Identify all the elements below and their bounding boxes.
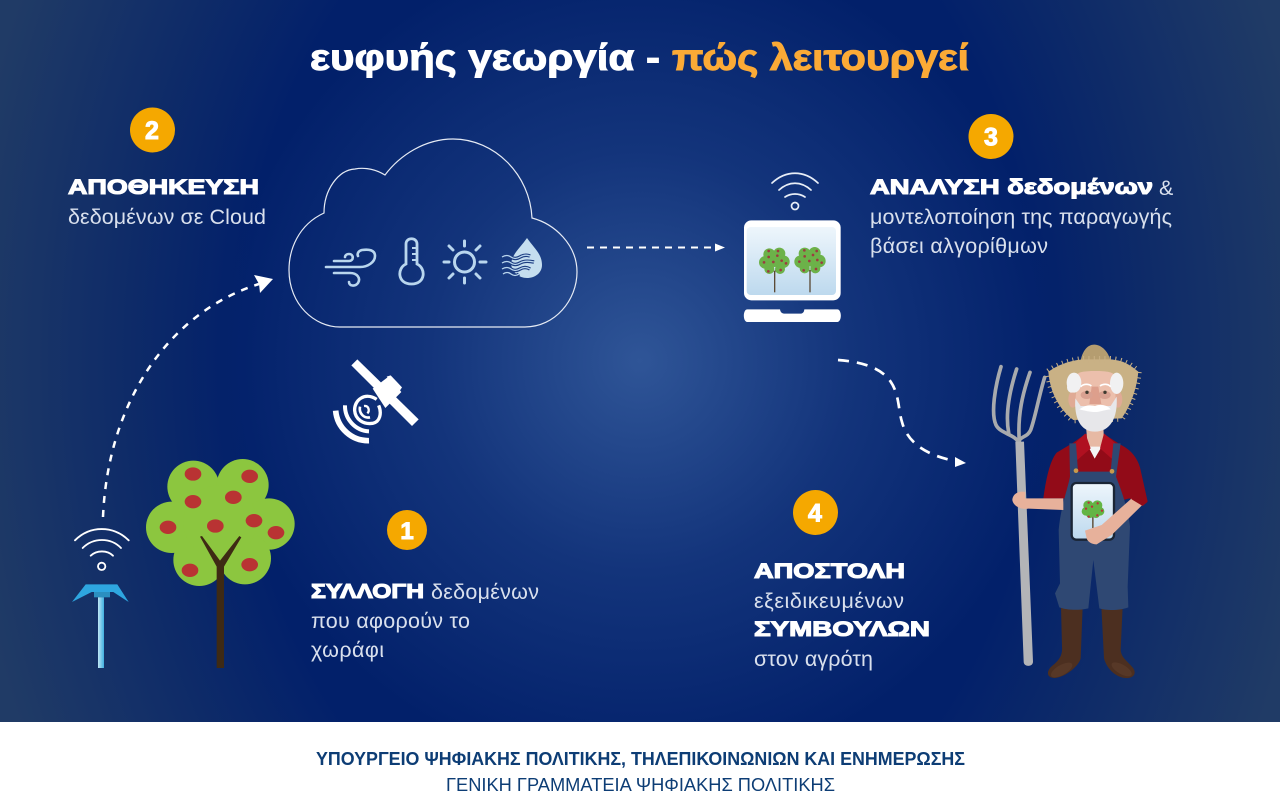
footer text xyxy=(316,749,965,795)
step 3 text: analysis xyxy=(870,176,1173,258)
tree right xyxy=(794,247,826,292)
step 2 badge: 2 xyxy=(145,117,159,145)
arrow: laptop to farmer xyxy=(838,360,966,467)
icon: humidity drop xyxy=(502,238,542,278)
straw hat xyxy=(1048,345,1138,420)
right arm and hand xyxy=(1085,496,1147,544)
footer band xyxy=(0,722,1280,812)
apples xyxy=(160,467,284,577)
step 1 badge xyxy=(387,510,427,550)
footer text: ΓΕΝΙΚΗ ΓΡΑΜΜΑΤΕΙΑ ΨΗΦΙΑΚΗΣ ΠΟΛΙΤΙΚΗΣ xyxy=(446,775,835,795)
step 4 badge: 4 xyxy=(808,500,822,528)
title: πώς λειτουργεί xyxy=(672,37,969,78)
step 1 text: collection xyxy=(311,580,539,662)
step 4 text: advice: εξειδικευμένων xyxy=(754,589,904,613)
step 3 badge xyxy=(968,114,1014,159)
icon: sun xyxy=(444,241,486,283)
step 2 text: storage xyxy=(68,176,266,229)
step 4 text: advice: ΣΥΜΒΟΥΛΩΝ xyxy=(754,618,930,641)
icon: thermometer xyxy=(400,239,423,284)
tablet xyxy=(1072,483,1114,540)
step 4 text: advice xyxy=(754,560,930,671)
step 3 text: analysis: βάσει αλγορίθμων xyxy=(870,234,1048,258)
step 2 text: storage: δεδομένων σε Cloud xyxy=(68,205,266,229)
title: ευφυής γεωργία - xyxy=(310,37,660,78)
step 3 text: analysis: ΑΝΑΛΥΣΗ δεδομένων xyxy=(870,176,1153,199)
step 1 badge: 1 xyxy=(400,518,414,545)
arrow: cloud to laptop xyxy=(587,244,725,252)
left arm xyxy=(1012,492,1063,510)
step 3 text: analysis: & xyxy=(1159,176,1173,200)
step 1 text: collection: ΣΥΛΛΟΓΗ xyxy=(311,580,424,603)
title xyxy=(310,37,969,78)
footer text: ΥΠΟΥΡΓΕΙΟ ΨΗΦΙΑΚΗΣ ΠΟΛΙΤΙΚΗΣ, ΤΗΛΕΠΙΚΟΙΝΩΝΙΩΝ ΚΑΙ ΕΝΗΜΕΡΩΣΗΣ xyxy=(316,749,965,769)
boots xyxy=(1048,607,1135,680)
icon: apple tree xyxy=(146,459,295,668)
icon: field sensor with wifi xyxy=(72,529,129,668)
step 2 badge xyxy=(130,108,175,152)
icon: wifi above laptop xyxy=(772,173,818,210)
step 3 text: analysis: μοντελοποίηση της παραγωγής xyxy=(870,205,1172,229)
shirt xyxy=(1043,434,1148,506)
step 1 text: collection: που αφορούν το xyxy=(311,609,470,633)
icon: wind xyxy=(326,250,375,286)
tree left xyxy=(759,248,790,292)
step 1 text: collection: δεδομένων xyxy=(431,580,539,604)
step 3 badge: 3 xyxy=(984,124,998,152)
icon: cloud with weather sensors xyxy=(289,139,577,327)
step 4 text: advice: στον αγρότη xyxy=(754,647,873,671)
tablet tree xyxy=(1082,500,1104,528)
step 4 text: advice: ΑΠΟΣΤΟΛΗ xyxy=(754,560,905,583)
illustration: farmer with pitchfork and tablet xyxy=(994,345,1148,680)
neck and collar xyxy=(1073,427,1117,460)
step 1 text: collection: χωράφι xyxy=(311,638,384,662)
head xyxy=(1067,371,1123,432)
step 2 text: storage: ΑΠΟΘΗΚΕΥΣΗ xyxy=(68,176,259,199)
overalls xyxy=(1055,443,1130,610)
strap buckles xyxy=(1074,468,1114,474)
icon: laptop with trees xyxy=(744,220,841,322)
step 4 badge xyxy=(793,490,838,535)
arrow: sensor to cloud xyxy=(103,275,273,517)
pitchfork xyxy=(994,367,1045,666)
icon: satellite xyxy=(336,359,419,441)
